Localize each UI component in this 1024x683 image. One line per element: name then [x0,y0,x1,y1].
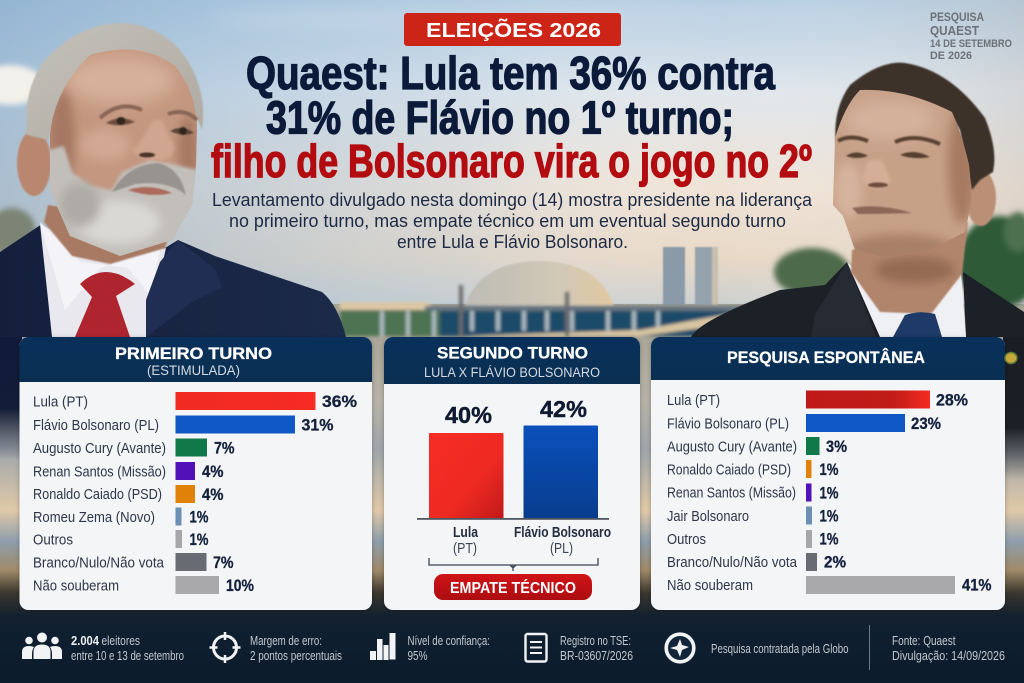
values [190,392,357,595]
Lula face [50,50,197,256]
row labels: Romeu Zema (Novo) [33,509,155,526]
Lula tie [75,272,135,337]
text: margin of error: Margem de erro: [250,634,322,648]
row labels: Não souberam [33,578,119,594]
text: confidence level: 95% [408,649,428,663]
title [211,47,812,187]
Lula collar [40,222,160,310]
values: 28% [936,390,968,410]
row labels: Ronaldo Caiado (PSD) [33,486,162,503]
Flávio tie [893,312,942,337]
column chart: 40% [445,402,492,428]
row labels: Flávio Bolsonaro (PL) [33,417,159,434]
values: 7% [213,553,234,572]
subtitle: no primeiro turno, mas empate técnico em um eventual segundo turno [229,210,786,231]
values: 1% [820,484,838,502]
Lula lapel [146,240,222,337]
portrait: Lula [0,23,346,337]
panel: pesquisa espontânea [651,337,1005,610]
icon: people [22,632,62,659]
survey tag top right: PESQUISA [930,12,984,24]
suit continuation left [0,330,22,460]
congress esplanade [340,285,750,337]
column chart: Lula [453,524,479,541]
subtitle [212,189,813,252]
Lula suit [0,224,346,337]
subheading: LULA X FLÁVIO BOLSONARO [424,364,600,380]
heading: SEGUNDO TURNO [437,344,588,362]
row labels: Renan Santos (Missão) [33,464,166,480]
text: source [892,634,1005,663]
row labels [667,392,798,594]
subtitle: Levantamento divulgado nesta domingo (14) mostra presidente na liderança [212,189,813,210]
panel header [20,337,372,382]
text: confidence level [408,634,490,663]
icon: document [526,634,546,662]
trees left [0,208,36,256]
Lula moustache [112,163,186,195]
icon: lapel pin [1005,352,1017,364]
text: voters [71,634,184,663]
panel header [384,337,640,384]
values: 1% [820,530,838,548]
values: 7% [214,438,234,458]
Lula shirt [40,224,166,337]
icon: target [210,632,240,663]
values: 4% [202,485,224,504]
bar chart [176,392,316,594]
survey tag top right: DE 2026 [930,50,972,62]
values: 41% [962,576,992,594]
text: confidence level: Nível de confiança: [408,634,490,648]
callout: empate técnico: EMPATE TÉCNICO [450,580,576,597]
column chart: Flávio Bolsonaro [514,524,611,541]
badge: Eleições 2026 [404,13,621,46]
Lula hair [26,23,203,140]
text: voters: eleitores [102,634,140,648]
values: 10% [226,576,254,595]
survey tag top right [930,12,1012,62]
Flávio eyes and brows [838,138,940,158]
column chart: (PL) [550,540,573,557]
values: 3% [826,437,847,456]
subheading: (ESTIMULADA) [147,362,240,378]
subtitle: entre Lula e Flávio Bolsonaro. [397,231,628,252]
title: 31% de Flávio no 1º turno; [266,92,734,144]
text: TSE registry: BR-03607/2026 [560,649,633,663]
Flávio face [833,90,972,258]
panel: primeiro turno [20,337,372,610]
text: TSE registry [560,634,633,663]
text: voters: 2.004 [71,634,99,648]
values: 1% [190,508,208,526]
values: 1% [820,506,838,526]
Lula mouth [128,187,172,195]
survey tag top right: QUAEST [930,23,979,38]
icon: national congress dome [465,261,614,307]
survey tag top right: 14 DE SETEMBRO [930,38,1012,50]
text: margin of error [250,634,342,663]
Flávio neck [851,222,968,314]
bar chart [806,390,955,594]
row labels: Jair Bolsonaro [667,508,749,525]
Lula beard [45,146,198,262]
icon: globe [666,634,694,662]
Lula eyes and brows [100,106,197,135]
Lula ear [17,130,51,196]
row labels [33,394,166,594]
text: contractor: Pesquisa contratada pela Globo [711,642,849,656]
Flávio nose [864,160,890,184]
panel header [651,337,1005,380]
bracket [429,558,598,571]
values: 4% [202,462,224,481]
panel: segundo turno [384,337,640,610]
Lula nose [133,120,174,160]
row labels: Flávio Bolsonaro (PL) [667,416,789,432]
icon: congress towers [663,247,718,305]
text: source: Divulgação: 14/09/2026 [892,649,1005,663]
Lula neck [44,205,172,264]
values: 23% [911,414,941,433]
text: margin of error: 2 pontos percentuais [250,649,342,663]
row labels: Outros [667,531,706,548]
title: Quaest: Lula tem 36% contra [246,47,775,99]
row labels: Branco/Nulo/Não vota [667,554,798,571]
heading: PESQUISA ESPONTÂNEA [727,348,925,367]
Flávio ear [968,174,997,227]
footer bar [0,613,1024,683]
title: filho de Bolsonaro vira o jogo no 2º [211,135,812,187]
text: TSE registry: Registro no TSE: [560,634,631,648]
row labels: Outros [33,532,73,548]
row labels: Augusto Cury (Avante) [667,438,797,456]
row labels: Lula (PT) [667,392,720,409]
text: voters: entre 10 e 13 de setembro [71,649,184,663]
row labels: Branco/Nulo/Não vota [33,554,165,572]
row labels: Lula (PT) [33,394,88,410]
column chart [417,396,611,557]
row labels: Renan Santos (Missão) [667,484,796,502]
values: 2% [824,552,846,572]
column chart: (PT) [453,540,477,557]
row labels: Augusto Cury (Avante) [33,440,166,457]
values: 36% [322,392,357,411]
heading: PRIMEIRO TURNO [115,344,272,363]
badge: Eleições 2026: ELEIÇÕES 2026 [426,18,601,42]
Flávio hair [835,63,994,190]
Flávio mouth [852,206,912,214]
values: 1% [190,530,208,549]
row labels: Ronaldo Caiado (PSD) [667,462,791,478]
trees right [774,212,1024,308]
row labels: Não souberam [667,577,753,594]
portrait: Flávio Bolsonaro [691,63,1024,337]
values: 31% [302,416,334,434]
text: source: Fonte: Quaest [892,634,956,648]
values: 1% [820,460,838,479]
column chart: 42% [540,396,587,422]
Flávio shirt [847,262,966,337]
Flávio suit [691,262,1024,337]
values [820,390,992,594]
icon: bars [370,633,396,660]
callout: empate técnico [434,574,592,600]
suit continuation right [1003,330,1024,480]
